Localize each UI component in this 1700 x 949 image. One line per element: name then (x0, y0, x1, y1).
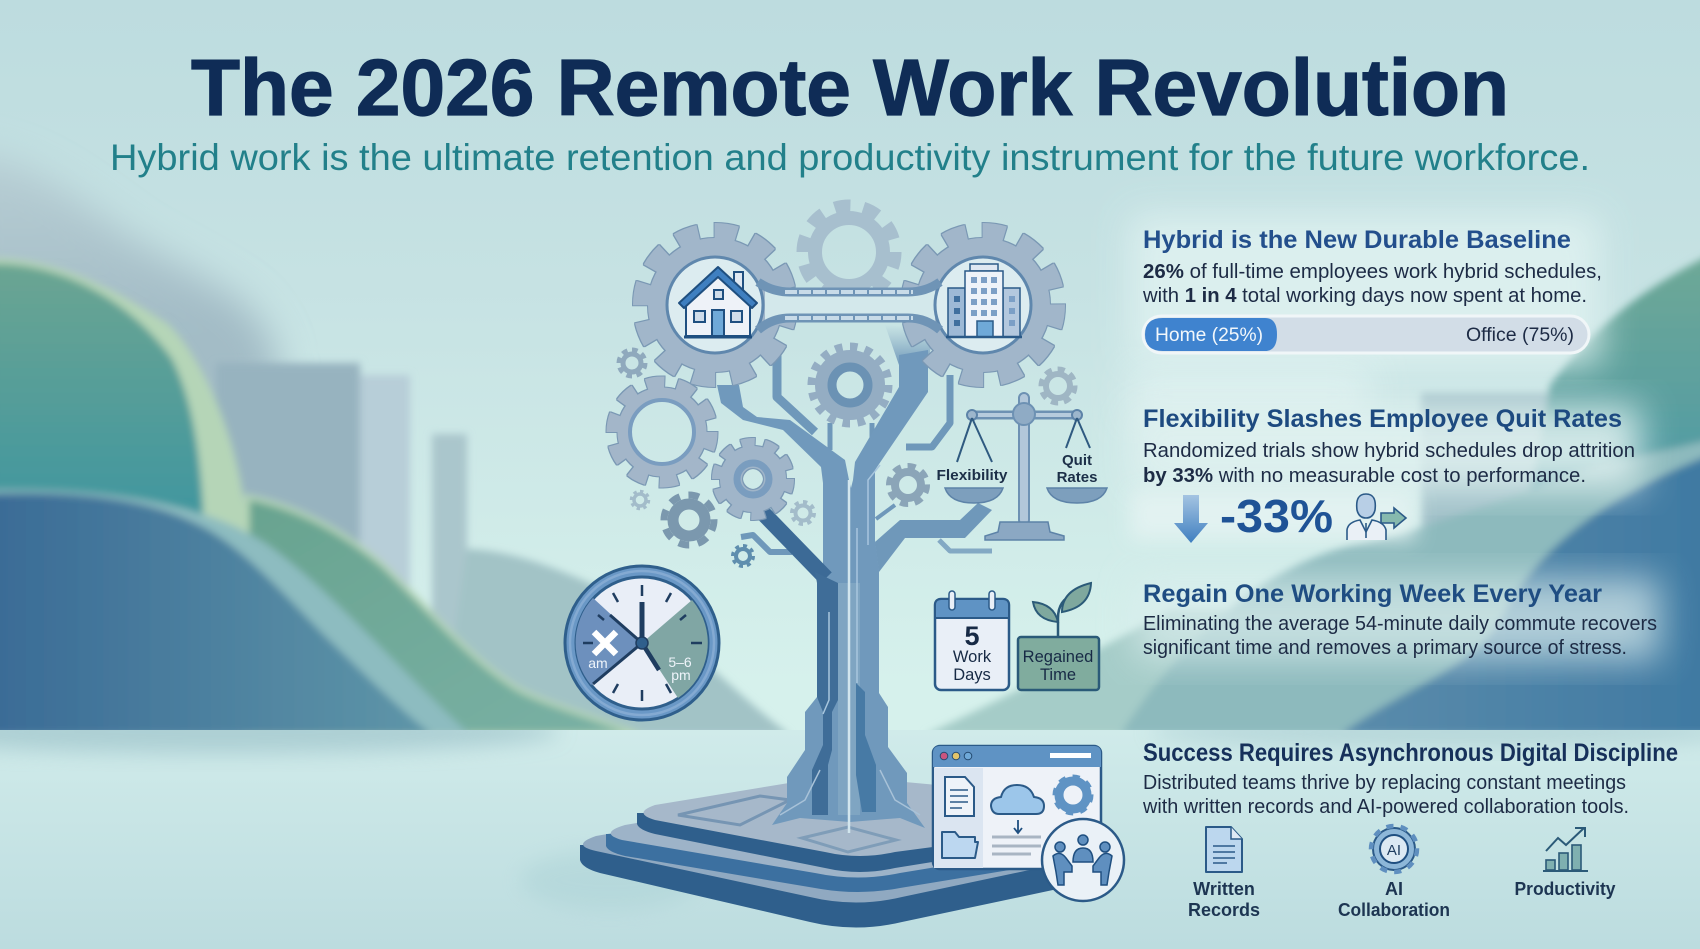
clock label: 5-6 pm (668, 654, 692, 683)
body text (1142, 771, 1629, 818)
icon: office building (946, 264, 1022, 337)
body text (1143, 439, 1635, 487)
app window icon (933, 746, 1124, 901)
progress bar: home vs office: Home (25%) (1155, 325, 1263, 346)
title: The 2026 Remote Work Revolution (191, 43, 1509, 132)
clock label: 5-6 pm: 5–6 (668, 654, 692, 670)
icon: written records: Written (1193, 879, 1255, 899)
clock label: 5-6 pm: pm (671, 667, 691, 683)
icon: productivity chart: Productivity (1514, 879, 1616, 899)
clock icon (565, 566, 719, 720)
calendar icon: 5 work days (935, 591, 1009, 690)
scale label: quit rates: Rates (1057, 469, 1097, 486)
top background gear (803, 206, 895, 298)
tree branches (741, 345, 992, 552)
heading: Hybrid is the New Durable Baseline (1143, 226, 1571, 254)
gears (613, 231, 1057, 515)
panel: async discipline (1142, 739, 1678, 920)
calendar icon: 5 work days: Work (953, 648, 992, 666)
icon: person leaving (1347, 494, 1406, 540)
gear rings (630, 400, 769, 495)
balance scale (936, 393, 1107, 540)
subtitle: Hybrid work is the ultimate retention and productivity instrument for the future workforce. (110, 137, 1590, 178)
stepped base platform (580, 782, 1100, 928)
heading: Flexibility Slashes Employee Quit Rates (1143, 405, 1622, 433)
tree trunk (717, 325, 992, 833)
body text (1142, 260, 1602, 307)
icon: AI collaboration: Collaboration (1338, 900, 1450, 920)
icon: written records: Records (1188, 900, 1260, 920)
small gears (619, 347, 1075, 566)
body text: Eliminating the average 54-minute daily commute recovers (1143, 612, 1657, 635)
body text (1143, 612, 1657, 659)
icon: meeting circle (1042, 819, 1124, 901)
scale label: quit rates (1057, 452, 1097, 486)
icon: house (679, 267, 757, 337)
icon: regained time plant: Regained (1023, 648, 1093, 666)
progress bar: home vs office (1143, 316, 1589, 353)
body text: Randomized trials show hybrid schedules drop attrition (1143, 439, 1635, 462)
stat: minus 33 percent: -33% (1220, 490, 1333, 542)
icon: down arrow (1174, 495, 1208, 543)
icon: written records (1188, 827, 1260, 920)
scale label: flexibility: Flexibility (936, 467, 1008, 484)
panel: regain time (1143, 580, 1657, 659)
icon: AI collaboration (1338, 826, 1450, 920)
progress bar: home vs office: Office (75%) (1466, 325, 1574, 346)
icon: AI collaboration: AI (1387, 842, 1401, 859)
icon: productivity chart (1514, 828, 1616, 899)
body text: significant time and removes a primary source of stress. (1143, 636, 1627, 659)
icon: AI collaboration: AI (1385, 879, 1403, 899)
body text: 26% of full-time employees work hybrid schedules, (1143, 260, 1602, 283)
body text: with written records and AI-powered collaboration tools. (1142, 795, 1629, 818)
panel: hybrid baseline (1142, 226, 1602, 353)
body text: by 33% with no measurable cost to performance. (1143, 464, 1586, 487)
heading: Regain One Working Week Every Year (1143, 580, 1602, 608)
panel: quit rates (1143, 405, 1635, 543)
icon: regained time plant (1018, 583, 1099, 690)
body text: with 1 in 4 total working days now spent at home. (1142, 284, 1587, 307)
clock label: am: am (588, 655, 608, 671)
icon: regained time plant: Time (1040, 666, 1076, 684)
tree illustration (580, 206, 1107, 928)
body text: Distributed teams thrive by replacing constant meetings (1143, 771, 1626, 794)
scale label: quit rates: Quit (1062, 452, 1092, 469)
calendar icon: 5 work days: 5 (964, 621, 980, 651)
calendar icon: 5 work days: Days (953, 666, 991, 684)
connector belt between home and office gears (667, 257, 1031, 353)
